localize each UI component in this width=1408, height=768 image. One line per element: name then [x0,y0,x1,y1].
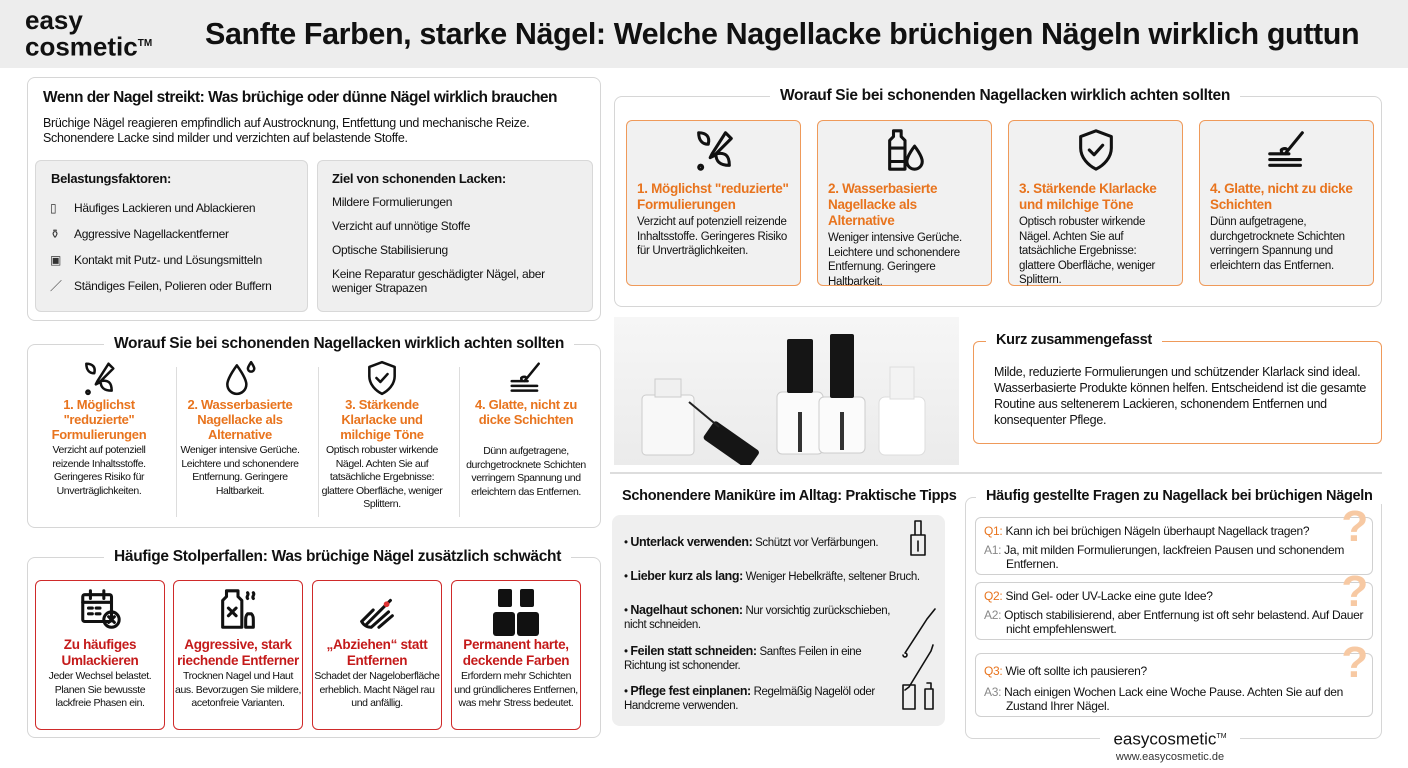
Q2: Q2: Sind Gel- oder UV-Lacke eine gute Idee? [984,589,1213,603]
card 3: 3. Stärkende Klarlacke und milchige Töne [1019,181,1156,212]
card 1: Verzicht auf potenziell reizende Inhaltsstoffe. Geringeres Risiko für Unverträglichkeiten. [637,216,787,257]
card 2: Aggressive, stark riechende Entferner [177,637,299,668]
card 2 [173,580,303,730]
col 3: 3. Stärkende Klarlacke und milchige Töne [340,397,424,442]
card 4: 4. Glatte, nicht zu dicke Schichten [1210,181,1353,212]
title: Worauf Sie bei schonenden Nagellacken wirklich achten sollten [114,335,564,352]
card 1 [35,580,165,730]
panel: tips: • Unterlack verwenden: Schützt vor Verfärbungen. [624,535,878,549]
panel: tips: • Nagelhaut schonen: Nur vorsichtig zurückschieben, nicht schneiden. [624,603,890,631]
box: Belastungsfaktoren: ／ [50,279,62,293]
col 2: 2. Wasserbasierte Nagellacke als Alternative [188,397,292,442]
footer logo: easycosmeticTM [1113,730,1227,749]
Q1: A1: Ja, mit milden Formulierungen, lackfreien Pausen und schonendem Entfernen. [984,543,1344,571]
title: Sanfte Farben, starke Nägel: Welche Nagellacke brüchigen Nägeln wirklich guttun [205,17,1359,51]
Q1: Q1: Kann ich bei brüchigen Nägeln überhaupt Nagellack tragen? [984,524,1309,538]
col 1: 1. Möglichst "reduzierte" Formulierungen [52,397,146,442]
box: Belastungsfaktoren: Aggressive Nagellackentferner [74,227,229,241]
heading: Wenn der Nagel streikt: Was brüchige oder dünne Nägel wirklich brauchen [43,89,557,106]
photo: nail polish bottles [614,317,959,465]
summary callout [973,341,1382,444]
card 4 [1199,120,1374,286]
Q3: A3: Nach einigen Wochen Lack eine Woche Pause. Achten Sie auf den Zustand Ihrer Nägel. [984,685,1343,713]
col 1 [52,362,146,496]
Q3: ? [1341,638,1368,687]
Q2: ? [1341,567,1368,616]
Q2: A2: Optisch stabilisierend, aber Entfernung ist oft sehr belastend. Auf Dauer nicht empfehlenswert. [984,608,1363,636]
panel: criteria right [614,96,1382,307]
card 2: Trocknen Nagel und Haut aus. Bevorzugen Sie mildere, acetonfreie Varianten. [175,670,301,709]
box: Ziel [317,160,593,312]
card 4: Erfordern mehr Schichten und gründlicheres Entfernen, was mehr Stress bedeutet. [454,670,578,709]
box: Belastungsfaktoren: ▯ [50,201,56,215]
card 4 [451,580,581,730]
panel: tips: • Feilen statt schneiden: Sanftes Feilen in eine Richtung ist schonender. [624,644,861,672]
logo: easy [25,5,83,35]
logo: cosmeticTM [25,32,152,62]
Q3 [975,653,1373,717]
panel: needs [27,77,601,321]
intro text: Schonendere Lacke sind milder und verzichten auf belastende Stoffe. [43,130,408,144]
logo [25,5,152,62]
box: Ziel: Ziel von schonenden Lacken: [332,171,506,186]
panel: criteria left [27,344,601,528]
card 1 [626,120,801,286]
panel: tips: • Pflege fest einplanen: Regelmäßig Nagelöl oder Handcreme verwenden. [624,684,875,712]
card 4: Permanent harte, deckende Farben [463,637,569,668]
card 1: Jeder Wechsel belastet. Planen Sie bewusste lackfreie Phasen ein. [49,670,151,709]
panel: pitfalls [27,557,601,738]
col 3: Optisch robuster wirkende Nägel. Achten Sie auf tatsächliche Ergebnisse: glattere Oberfläche, weniger Splittern. [322,444,442,510]
card 1: Zu häufiges Umlackieren [62,637,138,668]
col 4: Dünn aufgetragene, durchgetrocknete Schichten verringern Spannung und erleichtern das Entfernen. [466,445,586,498]
box: Belastungsfaktoren: Kontakt mit Putz- und Lösungsmitteln [74,253,262,267]
icons [902,520,936,710]
Q2 [975,582,1373,640]
intro text [43,116,529,144]
col 4: 4. Glatte, nicht zu dicke Schichten [475,397,577,427]
box: Belastungsfaktoren: Häufiges Lackieren und Ablackieren [74,201,255,215]
box: Ziel: Optische Stabilisierung [332,243,448,257]
box: Belastungsfaktoren: Belastungsfaktoren: [51,171,171,186]
intro text: Brüchige Nägel reagieren empfindlich auf Austrocknung, Entfettung und mechanische Reize. [43,116,529,130]
card 3: „Abziehen“ statt Entfernen [327,637,427,668]
box: Ziel: Keine Reparatur geschädigter Nägel, aber weniger Strapazen [332,267,545,295]
card 3 [312,580,442,730]
card 2: Weniger intensive Gerüche. Leichtere und schonendere Entfernung. Geringere Haltbarkeit. [828,232,962,288]
Q1: ? [1341,502,1368,551]
col 3 [322,360,443,510]
card 2 [817,120,992,286]
title: Worauf Sie bei schonenden Nagellacken wirklich achten sollten [780,87,1230,104]
FAQ title: Häufig gestellte Fragen zu Nagellack bei brüchigen Nägeln [986,488,1373,504]
card 3: Schadet der Nageloberfläche erheblich. Macht Nägel rau und anfällig. [314,670,440,709]
card 1: 1. Möglichst "reduzierte" Formulierungen [637,181,789,212]
box: Ziel: Mildere Formulierungen [332,195,452,209]
box: Belastungsfaktoren: ⚱ [50,227,60,241]
title: Häufige Stolperfallen: Was brüchige Nägel zusätzlich schwächt [114,548,561,565]
Q1 [975,517,1373,575]
Q3: Q3: Wie oft sollte ich pausieren? [984,664,1147,678]
footer logo [1100,727,1240,764]
panel: tips: • Lieber kurz als lang: Weniger Hebelkräfte, seltener Bruch. [624,569,920,583]
summary text: Milde, reduzierte Formulierungen und schützender Klarlack sind ideal. Wasserbasierte Produkte können helfen. Entscheidend ist die gesamte Routine aus seltenerem Lackieren, schonendem Entfernen und konsequenter Pflege. [994,365,1366,427]
box: Belastungsfaktoren: ▣ [50,253,61,267]
summary title: Kurz zusammengefasst [996,332,1152,348]
col 2 [180,360,299,496]
col 2: Weniger intensive Gerüche. Leichtere und schonendere Entfernung. Geringere Haltbarkeit. [180,444,299,496]
card 3: Optisch robuster wirkende Nägel. Achten Sie auf tatsächliche Ergebnisse: glattere Oberfläche, weniger Splittern. [1019,216,1155,286]
card 2: 2. Wasserbasierte Nagellacke als Alternative [828,181,937,228]
box: Belastungsfaktoren: Ständiges Feilen, Polieren oder Buffern [74,279,272,293]
col 1: Verzicht auf potenziell reizende Inhaltsstoffe. Geringeres Risiko für Unverträglichkeiten. [52,444,146,496]
card 3 [1008,120,1183,286]
panel: tips [612,515,945,726]
footer logo: www.easycosmetic.de [1116,751,1224,763]
tips heading: Schonendere Maniküre im Alltag: Praktische Tipps [622,488,956,504]
header band [0,0,1408,68]
box: Belastungsfaktoren [35,160,308,312]
card 4: Dünn aufgetragene, durchgetrocknete Schichten verringern Spannung und erleichtern das Entfernen. [1210,216,1345,272]
box: Ziel: Verzicht auf unnötige Stoffe [332,219,470,233]
panel: FAQ [965,497,1382,739]
col 4 [466,362,586,498]
